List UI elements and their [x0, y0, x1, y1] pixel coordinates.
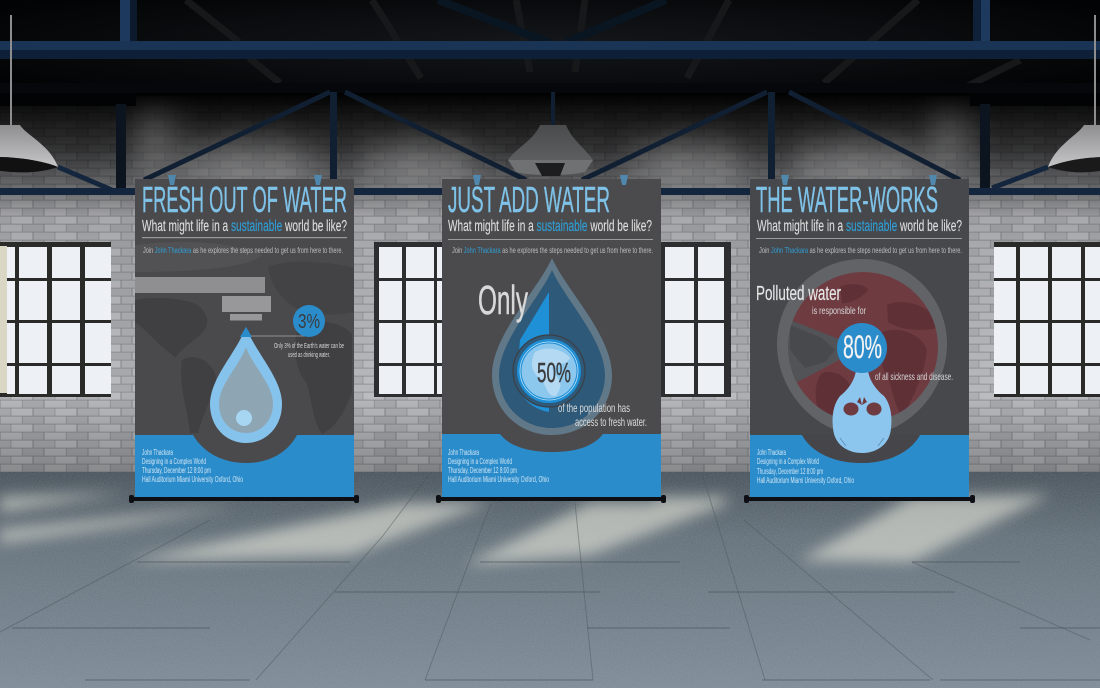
callout: 3 percent: 3%	[298, 311, 320, 333]
middle window	[374, 242, 731, 397]
text: polluted water statement	[756, 283, 953, 383]
right pendant lamp	[1048, 15, 1100, 172]
poster 1 footer band	[135, 435, 354, 497]
poster 2 event details: Hall Auditorium Miami University Oxford, Ohio	[448, 475, 549, 484]
poster 3 event details: Designing in a Complex World	[757, 457, 819, 466]
poster 3 event details: John Thackara	[757, 448, 786, 457]
poster 1 bottom rail	[129, 495, 359, 503]
text: polluted water statement: is responsible for	[812, 306, 866, 317]
poster 1 subtitle: What might life in a sustainable world be like?	[142, 218, 347, 235]
callout: 3 percent: Only 3% of the Earth's water can be	[274, 343, 344, 350]
poster 2 hangers	[473, 175, 628, 185]
globe pie chart: 80 percent	[777, 259, 947, 463]
poster 2 title: JUST ADD WATER	[448, 179, 610, 220]
poster 1 invitation: Join John Thackara as he explores the steps needed to get us from here to there.	[143, 245, 343, 255]
text: population statement	[558, 401, 647, 429]
poster 3 event details	[757, 448, 854, 485]
poster 2 event details: Designing in a Complex World	[448, 457, 512, 466]
poster 2 bottom rail	[436, 495, 666, 503]
poster 2: just add water	[436, 175, 666, 503]
icon: skull drop	[833, 370, 891, 453]
text: population statement: access to fresh water.	[575, 415, 647, 429]
icon: drop with globe	[492, 258, 612, 435]
poster 3 invitation: Join John Thackara as he explores the steps needed to get us from here to there.	[759, 245, 962, 255]
poster 3 hangers	[781, 175, 937, 185]
poster 2 subtitle: What might life in a sustainable world be like?	[448, 218, 652, 235]
right window	[994, 242, 1100, 397]
concrete floor	[0, 472, 1100, 688]
icon: faucet	[135, 277, 271, 320]
poster 2 background	[442, 179, 661, 497]
poster 1 background	[135, 179, 354, 497]
poster 2 invitation: Join John Thackara as he explores the steps needed to get us from here to there.	[452, 245, 653, 255]
poster 2 event details: Thursday, December 12 8:00 pm	[448, 466, 517, 475]
poster 3 subtitle: What might life in a sustainable world be like?	[757, 218, 962, 235]
text: 50 percent: 50%	[537, 357, 571, 388]
poster 3 bottom rail	[744, 495, 975, 503]
poster 1 event details: Thursday, December 12 8:00 pm	[142, 466, 211, 475]
icon: water drop	[210, 327, 282, 443]
poster 1 hangers	[168, 175, 322, 185]
poster 1 event details: Hall Auditorium Miami University Oxford, Ohio	[142, 475, 243, 484]
text: population statement: of the population has	[558, 401, 630, 415]
left window	[0, 242, 111, 397]
poster 1: fresh out of water	[129, 175, 359, 503]
poster 2 event details	[448, 448, 549, 484]
text: polluted water statement: Polluted water	[756, 283, 841, 305]
poster 2 event details: John Thackara	[448, 448, 479, 457]
callout: 3 percent	[247, 305, 344, 359]
steel beams	[0, 0, 1100, 195]
poster 1 event details	[142, 448, 243, 484]
text: polluted water statement: of all sickness and disease.	[875, 371, 953, 383]
poster 1 world map	[135, 298, 352, 434]
poster 1 title: FRESH OUT OF WATER	[142, 179, 347, 220]
poster 3 background	[750, 179, 969, 497]
text: only: Only	[478, 277, 528, 323]
poster 3 footer band	[750, 435, 969, 497]
brick wall	[0, 92, 1100, 472]
poster 1 event details: John Thackara	[142, 448, 173, 457]
callout: 3 percent: used as drinking water.	[288, 352, 330, 359]
circle: 80 percent: 80%	[843, 329, 882, 365]
ceiling	[0, 0, 1100, 110]
left pendant lamp	[0, 15, 58, 172]
poster 2 footer band	[442, 434, 661, 497]
poster 3 event details: Hall Auditorium Miami University Oxford, Ohio	[757, 476, 854, 485]
centre pendant lamp	[508, 125, 593, 176]
poster 3 event details: Thursday, December 12 8:00 pm	[757, 467, 823, 476]
circle: 80 percent	[837, 323, 887, 373]
poster 1 event details: Designing in a Complex World	[142, 457, 206, 466]
poster 3: the water-works	[744, 175, 975, 503]
